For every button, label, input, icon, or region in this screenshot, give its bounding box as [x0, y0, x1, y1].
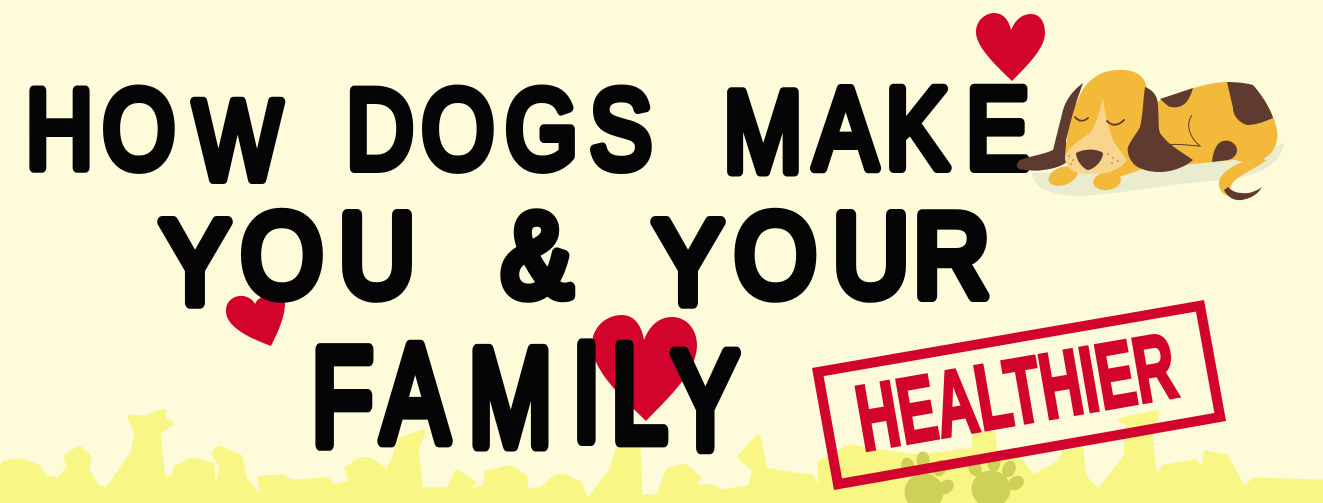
icon: small heart under YOU [226, 295, 285, 346]
title [26, 66, 1029, 478]
dog body [1120, 82, 1277, 172]
dog freckles [1068, 153, 1119, 165]
dog tail [1219, 157, 1267, 196]
title line 2: YOUR [653, 189, 989, 328]
dog front paws [1046, 162, 1140, 192]
icon: heart top right [976, 13, 1045, 81]
title line 1 [26, 66, 1029, 203]
illustration: sleeping dog [1017, 70, 1284, 200]
title line 1: HOW [26, 67, 282, 203]
icon: paw print right [967, 455, 1026, 503]
dog muzzle [1065, 97, 1127, 174]
dog left ear [1017, 83, 1083, 171]
dog silhouettes skyline [0, 411, 1323, 503]
title line 2: & [502, 189, 572, 321]
title line 2 [160, 189, 989, 328]
dog right ear [1128, 87, 1193, 172]
stamp: HEALTHIER [818, 306, 1220, 484]
dog eyes [1075, 117, 1124, 125]
dog tail tip [1224, 187, 1262, 200]
title line 3: FAMILY [312, 315, 739, 478]
dog nose [1076, 150, 1103, 170]
dog shadow [1032, 143, 1284, 196]
title line 1: DOGS [346, 67, 652, 192]
dog leg creases [1168, 115, 1200, 146]
title line 1: MAKE [723, 66, 1029, 197]
dog body patches [1160, 82, 1273, 162]
icon: heart behind FAMILY [592, 315, 697, 421]
icon: paw print left [899, 452, 956, 503]
title line 2: YOU [160, 189, 415, 328]
dog head [1065, 70, 1147, 172]
